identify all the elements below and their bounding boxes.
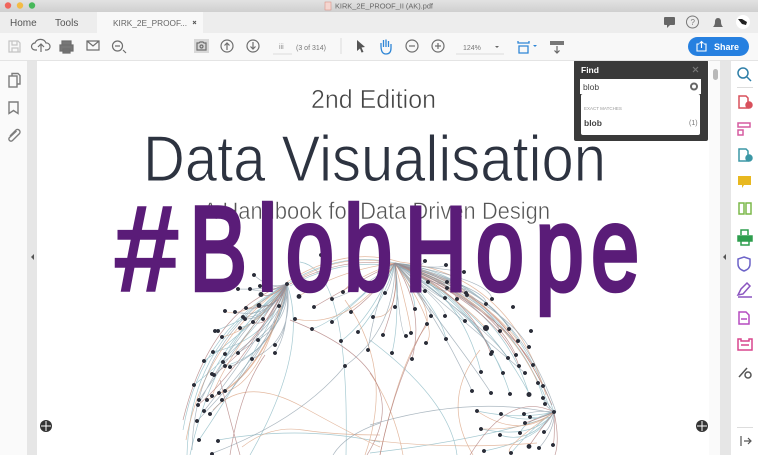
tab: home: Home	[10, 18, 37, 29]
icon: sign	[738, 283, 752, 297]
icon: mail	[87, 41, 99, 50]
icon: hand	[381, 40, 391, 54]
icon: help: ?	[690, 18, 696, 27]
icon: expand panel	[741, 436, 751, 446]
tab: tools: Tools	[55, 18, 78, 29]
icon: organize	[739, 203, 751, 214]
icon: minus	[406, 40, 418, 52]
icon: measure	[738, 339, 752, 350]
results list	[581, 94, 700, 135]
icon: cloud upload	[32, 39, 50, 52]
window title: KIRK_2E_PROOF_II (AK).pdf	[335, 2, 434, 10]
icon: help	[686, 16, 698, 28]
panel: left sidebar	[0, 60, 37, 455]
chart: circular network diagram	[183, 257, 557, 455]
headline: BlobHope hashtag: BlobHope	[189, 182, 639, 316]
heading: find: Find	[581, 65, 599, 75]
tab: active document: KIRK_2E_PROOF...	[113, 19, 187, 28]
icon: camera	[194, 39, 209, 53]
icon: right page crosshair	[696, 420, 708, 432]
panel: right tools sidebar	[731, 60, 758, 455]
search input: blob	[583, 82, 599, 92]
page number: iii	[279, 44, 284, 51]
icon: export	[738, 230, 752, 245]
icon: form	[739, 312, 749, 324]
results list: (1)	[689, 120, 698, 127]
icon: page down	[247, 40, 259, 52]
window buttons	[5, 2, 35, 9]
panel: find popup	[574, 60, 708, 141]
icon: avatar	[736, 15, 750, 29]
icon: protect	[738, 257, 750, 271]
icon: comment	[738, 176, 751, 188]
results list: blob	[584, 118, 602, 128]
zoom level	[456, 45, 504, 54]
icon: plus	[432, 40, 444, 52]
icon: stamp download	[550, 41, 564, 53]
icon: chat	[664, 17, 675, 28]
page number	[273, 44, 292, 54]
icon: combine	[738, 123, 750, 135]
title: Data Visualisation: Data Visualisation	[143, 122, 606, 195]
icon: left page crosshair	[40, 420, 52, 432]
icon: paperclip	[9, 130, 20, 141]
panel: page area	[37, 60, 720, 455]
zoom level: 124%	[463, 45, 481, 52]
panel: tab bar	[0, 12, 758, 33]
icon: save	[9, 41, 20, 52]
icon: bookmark	[9, 102, 18, 114]
icon: page up	[221, 40, 233, 52]
icon: edit pdf	[739, 149, 752, 161]
icon: bell	[713, 18, 723, 27]
page count: (3 of 314)	[296, 45, 326, 52]
panel: toolbar	[0, 33, 758, 61]
results list: EXACT MATCHES	[584, 106, 622, 111]
button: share: Share	[714, 42, 739, 52]
chart nodes: network dots	[192, 253, 556, 455]
icon: tools wrench	[739, 368, 751, 378]
tab: active document	[97, 12, 203, 33]
button: share	[688, 37, 749, 56]
icon: pages	[9, 74, 20, 87]
icon: fit page	[518, 41, 537, 53]
icon: zoom search	[738, 68, 751, 81]
panel: right gutter and scrollbar	[709, 60, 731, 455]
subtitle: handbook: A Handbook for Data Driven Design	[203, 198, 550, 225]
icon: create pdf	[739, 96, 752, 108]
headline: BlobHope hashtag: #	[116, 183, 177, 316]
icon: zoom out	[115, 46, 126, 53]
panel: title bar	[0, 0, 758, 12]
icon: print	[60, 41, 73, 53]
icon: close	[693, 67, 698, 72]
icon: cursor	[357, 40, 365, 52]
subtitle: edition: 2nd Edition	[311, 84, 436, 114]
